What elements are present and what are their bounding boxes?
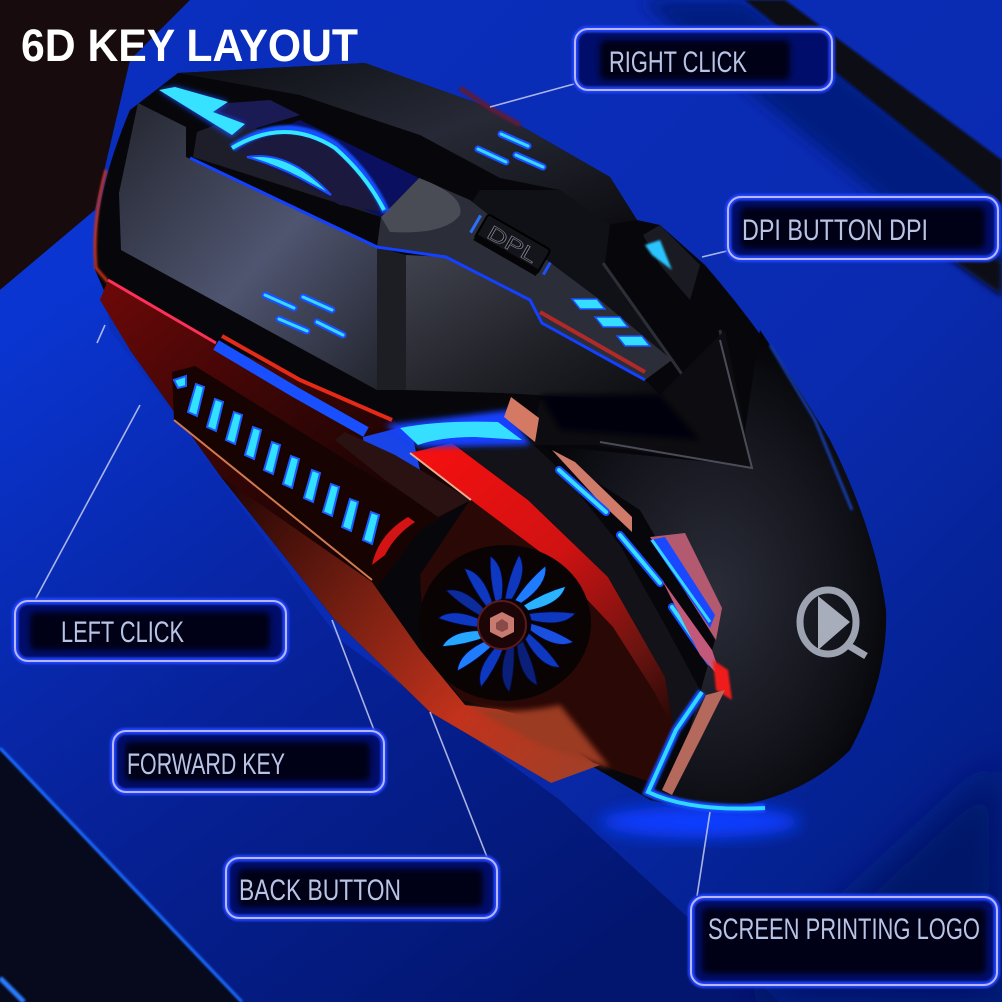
red outer rim left [95,170,108,282]
cyan rim lights [559,470,710,662]
centre divider [377,247,406,390]
DPI button [468,211,556,279]
rear shell [540,330,886,808]
callout: back button: BACK BUTTON [239,874,401,907]
leader lines [35,84,727,896]
callout: screen printing logo [691,897,997,985]
fan [419,545,591,701]
dark band next to red shell [452,432,700,730]
blue trim lines [190,158,645,380]
blue side stripe [216,336,470,505]
red crescent [372,517,415,565]
red side shell [100,280,470,620]
rear chevron [530,330,752,468]
mouse body silhouette [95,63,886,808]
callout: left click: LEFT CLICK [61,616,184,649]
scroll arrow [159,87,245,135]
scroll wheel window [193,100,419,217]
bottom rim light [648,690,765,809]
right side button [603,225,745,465]
callout: DPI button: DPI BUTTON DPI [742,214,928,247]
mouse [95,63,886,809]
fan housing [420,500,674,782]
left top panel [119,103,377,390]
callout: left click [15,601,286,661]
callout: forward key: FORWARD KEY [127,748,285,781]
icon: left panel vent lights [265,295,343,335]
red tip [713,660,732,700]
top shell [178,63,637,225]
rear edge accent lines [770,345,852,510]
red rim highlight top [460,88,520,125]
title: 6D KEY LAYOUT [21,20,358,71]
callout: DPI button [728,197,998,259]
icon: three bar lights [572,299,650,346]
salmon side strip [552,450,632,532]
icon: top right vent lights [478,134,543,167]
neck between wheel and side bars [377,178,672,380]
callout: forward key [113,731,384,792]
red shell band [410,443,674,730]
side blue light panel [650,533,722,680]
scroll arrow glow [159,87,245,137]
callout: right click: RIGHT CLICK [609,46,747,79]
lower side panel [221,477,600,783]
cyan top bar light [385,410,530,447]
side light bar track [172,366,438,580]
salmon block [504,397,539,442]
right top panel [406,255,660,400]
callout: right click [575,29,832,90]
callout: back button [226,858,497,918]
icon: Q play logo [800,590,866,656]
grey side slat [335,432,471,517]
side cyan light bars [174,376,379,544]
DPI button: DPL [483,222,541,268]
